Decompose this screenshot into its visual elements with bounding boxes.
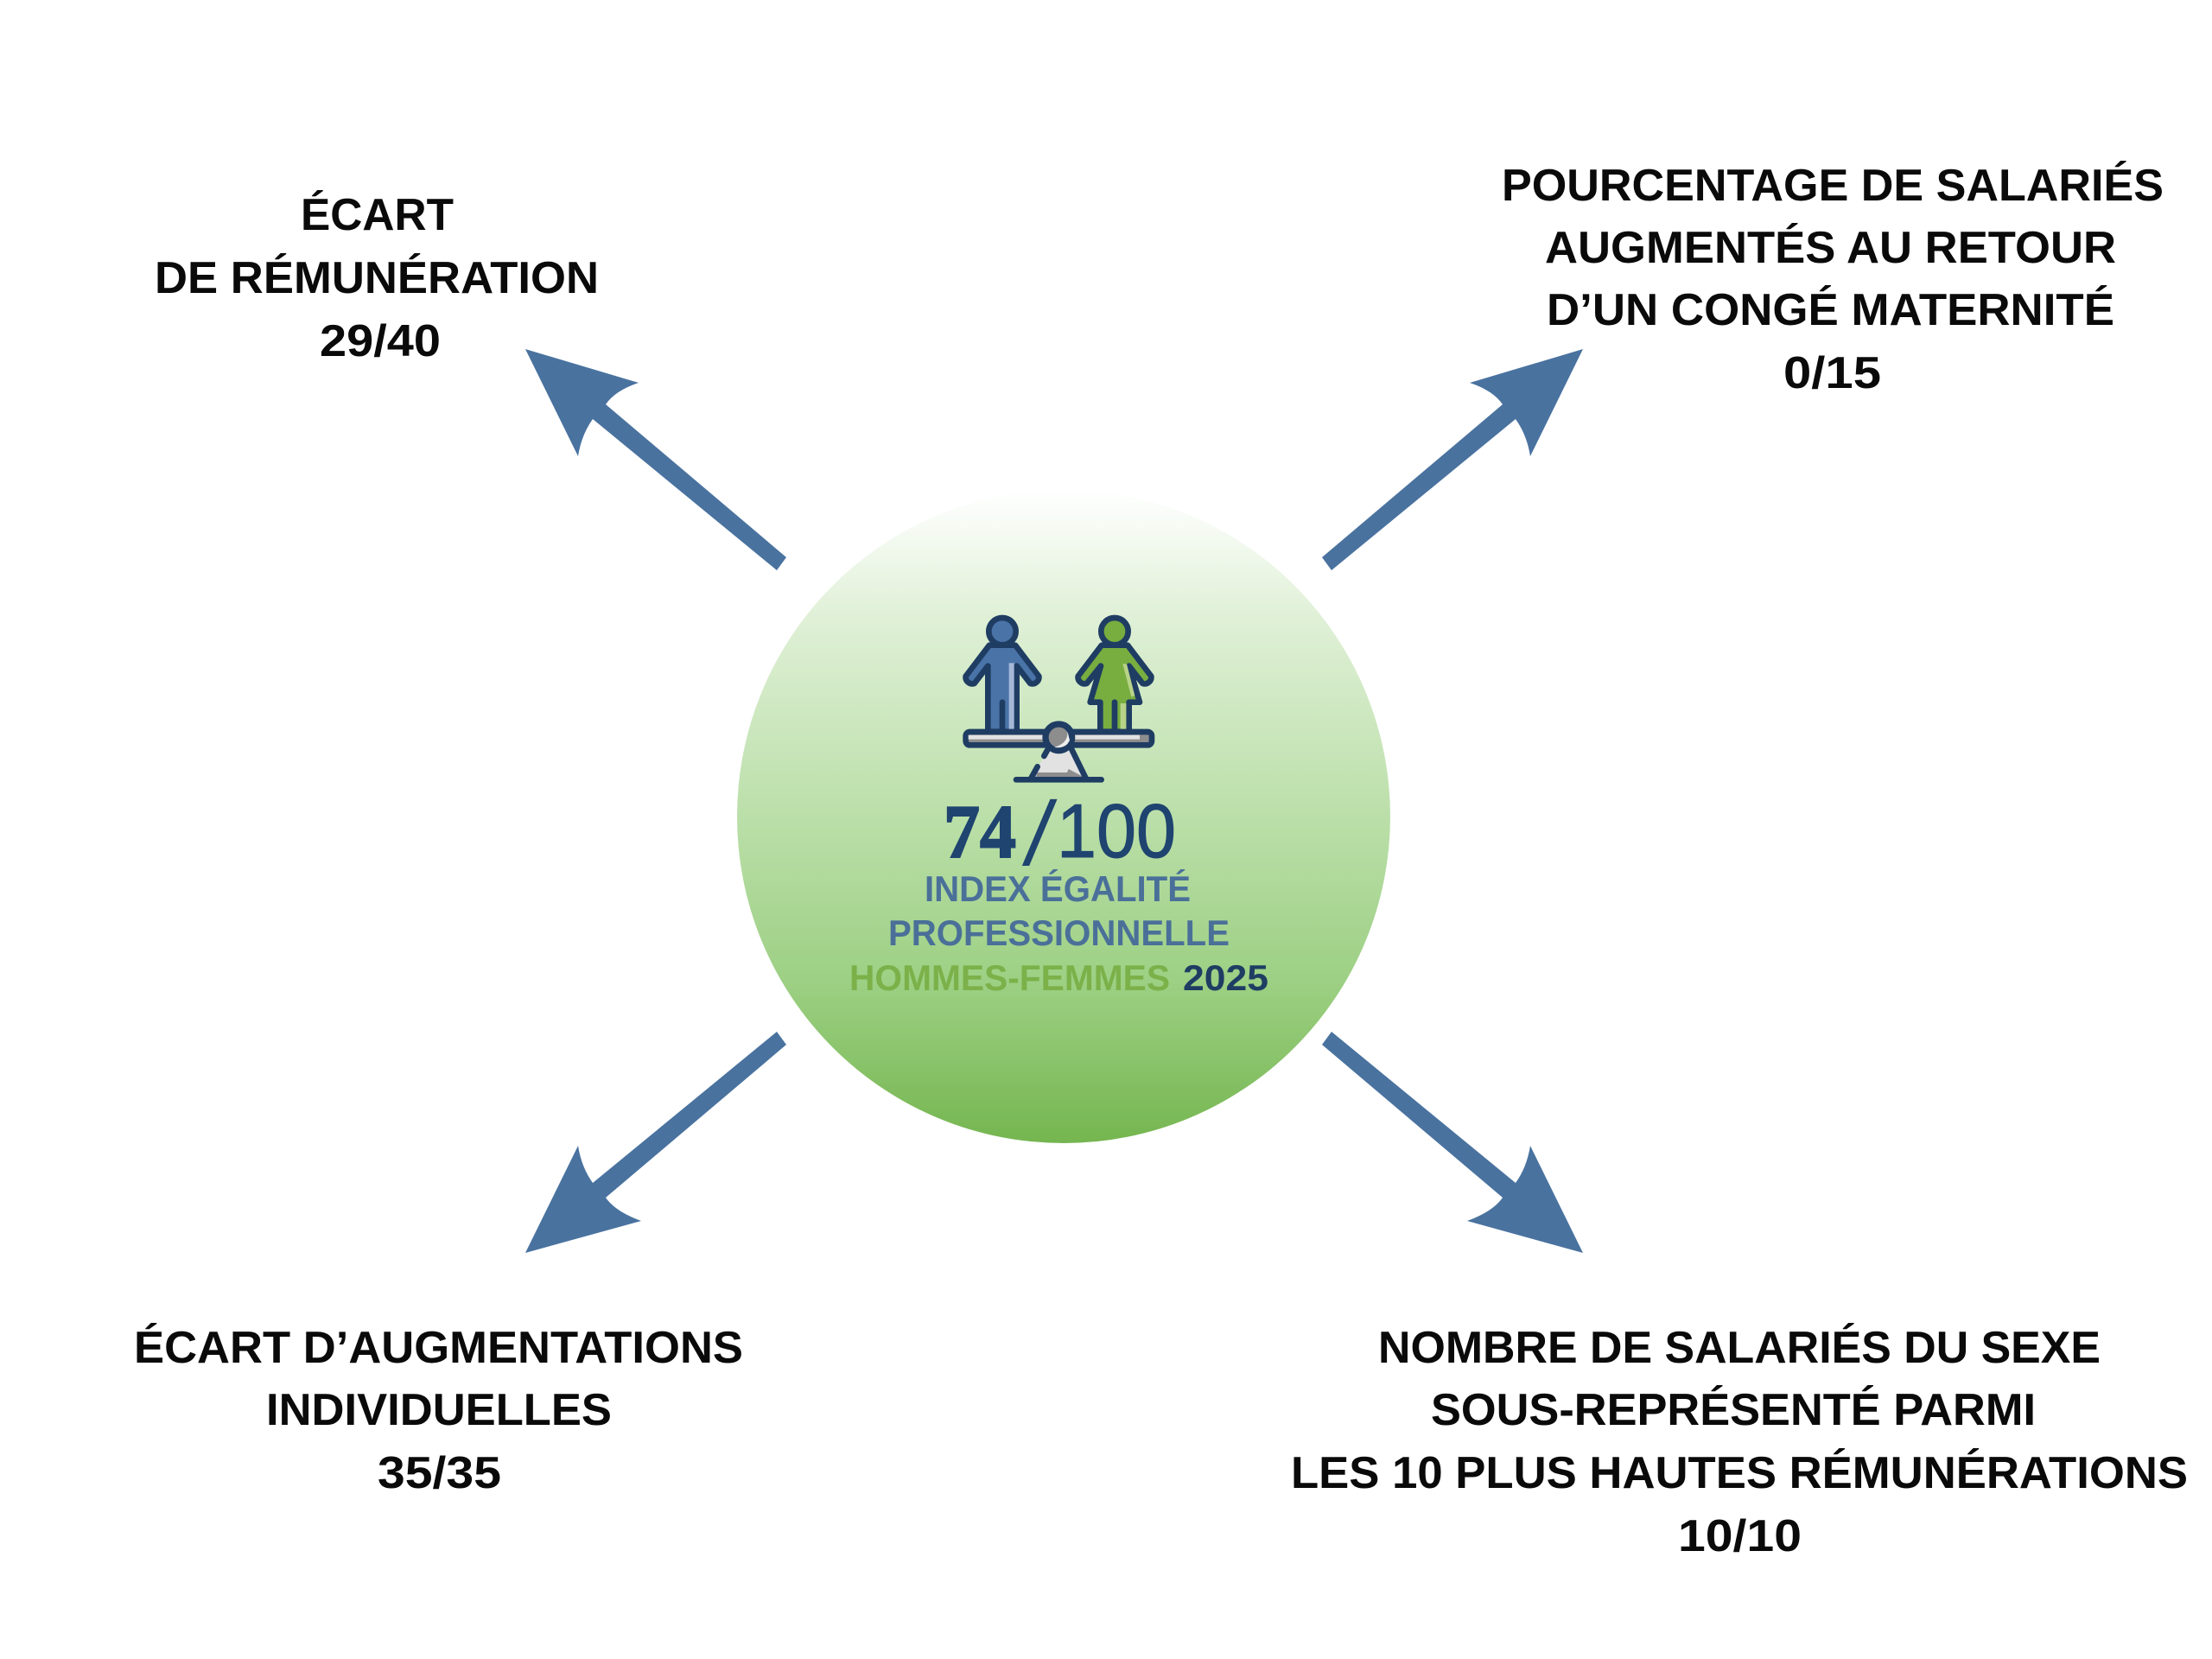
text block: écart de rémunération: 29/40 [320,316,441,366]
text block: pourcentage de salariés augmentés: D’UN CONGÉ MATERNITÉ [1547,285,2114,335]
text block: écart d'augmentations individuelles: 35/35 [378,1448,501,1498]
text: index title: PROFESSIONNELLE [888,912,1230,953]
text block: pourcentage de salariés augmentés: 0/15 [1783,348,1881,398]
icon: seesaw stand [1016,749,1102,779]
text block: écart de rémunération: DE RÉMUNÉRATION [155,253,599,303]
text block: nombre de salariés du sexe sous-représenté: SOUS-REPRÉSENTÉ PARMI [1431,1385,2036,1435]
text: index title: INDEX ÉGALITÉ [925,868,1191,909]
text block: écart d'augmentations individuelles [134,1323,743,1498]
text block: écart d'augmentations individuelles: INDIVIDUELLES [266,1385,612,1435]
score: 74/100 [944,784,1176,885]
icon: seesaw beam [966,724,1152,751]
arrow: bottom right [1322,1032,1583,1253]
arrow: top left [525,349,786,570]
icon: woman figure [1078,618,1151,732]
score: 74/100: / [1020,784,1060,885]
text block: nombre de salariés du sexe sous-représenté [1291,1323,2188,1561]
text block: pourcentage de salariés augmentés [1502,161,2164,398]
arrow: top right [1322,349,1583,570]
text: index title: HOMMES-FEMMES [849,957,1170,998]
score: 74/100: 100 [1057,788,1176,874]
score: 74/100: 74 [944,791,1016,874]
text block: pourcentage de salariés augmentés: AUGMENTÉS AU RETOUR [1545,223,2116,273]
text block: nombre de salariés du sexe sous-représenté: 10/10 [1678,1511,1802,1561]
arrow: bottom left [525,1032,786,1253]
panel: central circle [737,490,1390,1143]
text block: écart de rémunération: ÉCART [301,190,454,240]
icon: man figure [966,618,1039,732]
text block: nombre de salariés du sexe sous-représenté: NOMBRE DE SALARIÉS DU SEXE [1378,1323,2101,1373]
text block: pourcentage de salariés augmentés: POURCENTAGE DE SALARIÉS [1502,161,2164,211]
text: index title [849,868,1268,998]
text block: écart d'augmentations individuelles: ÉCART D’AUGMENTATIONS [134,1323,743,1373]
text block: écart de rémunération [155,190,599,366]
text: index title: 2025 [1183,957,1268,998]
icon: man and woman on a balance [966,618,1152,779]
text block: nombre de salariés du sexe sous-représenté: LES 10 PLUS HAUTES RÉMUNÉRATIONS [1291,1448,2188,1498]
